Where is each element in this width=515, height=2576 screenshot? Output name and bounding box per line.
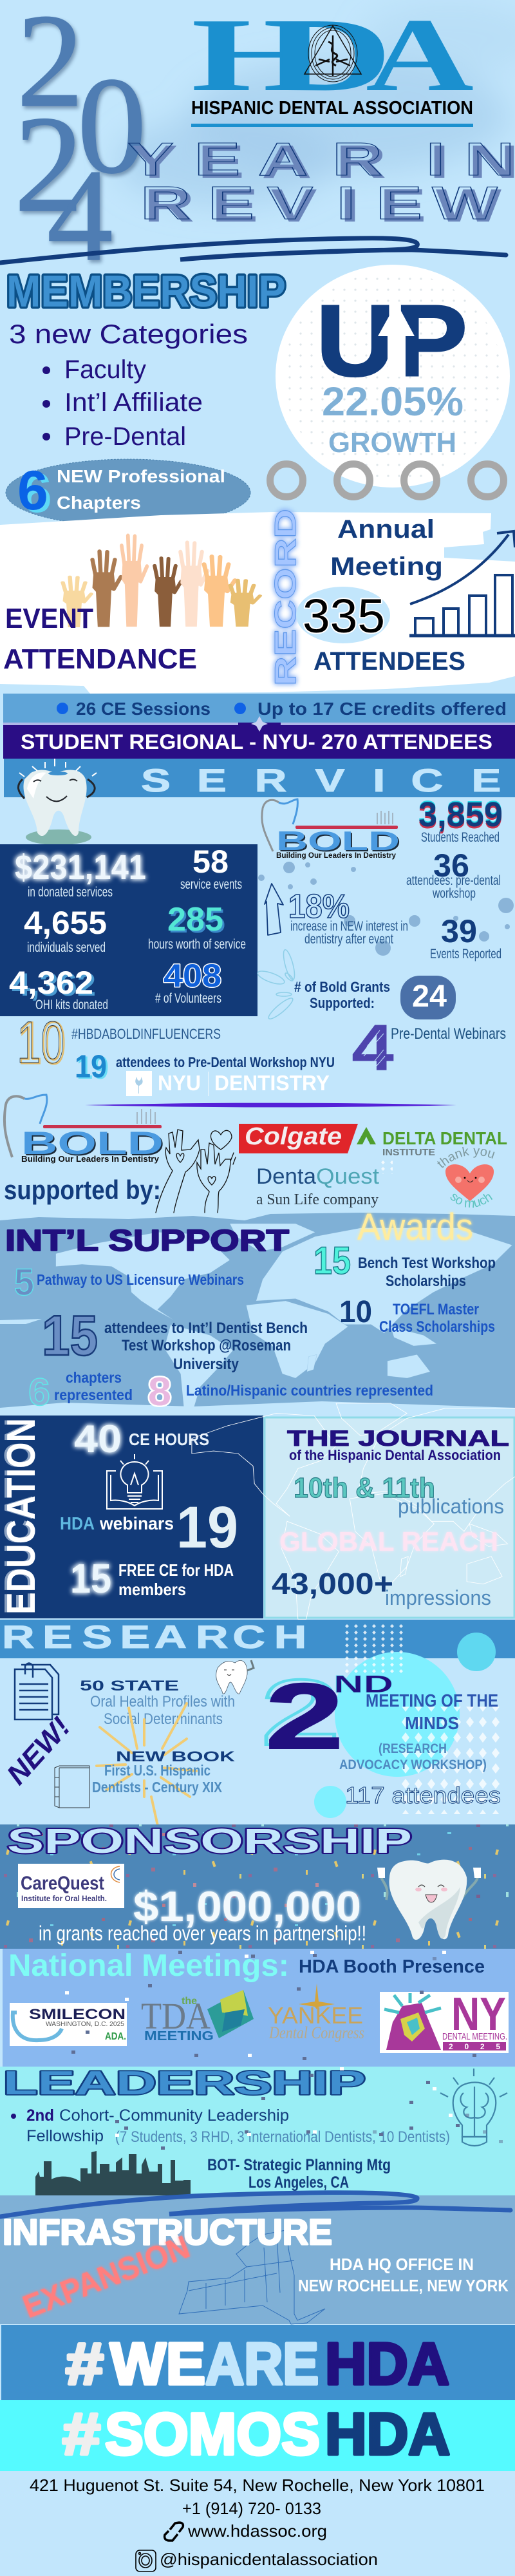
service hours stat: hours worth of service (148, 937, 246, 952)
booth presence caption: HDA Booth Presence (299, 1956, 485, 1977)
impressions stat: impressions (385, 1586, 491, 1609)
publications stat: publications (398, 1495, 504, 1518)
year 2024 stacked digits: 2 (14, 87, 84, 241)
grants caption: in grants reached over years in partnership!! (39, 1922, 366, 1945)
new chapters pill: 6 (21, 462, 52, 524)
publications stat (294, 1472, 504, 1518)
interest increase stat: dentistry after event (304, 932, 393, 947)
Yankee dental congress logo: Dental Congress (268, 2023, 364, 2042)
new book text: NEW BOOK (116, 1748, 235, 1765)
city skyline illustration (35, 2151, 191, 2195)
CE hours stat: 40 (74, 1417, 122, 1461)
UP wordmark with arrow: UP (316, 285, 467, 397)
Greater NY dental meeting logo: NY (451, 1989, 506, 2040)
address: 421 Huguenot St. Suite 54, New Rochelle, New York 10801 (30, 2476, 485, 2495)
year 2024 stacked digits: 4 (47, 142, 113, 289)
we are HDA hashtag band: WE (110, 2331, 205, 2397)
DentaQuest logo: Denta (256, 1164, 316, 1189)
white brush panel (0, 512, 515, 694)
somos HDA hashtag band (0, 2400, 515, 2471)
title: year in review: REVIEW (140, 178, 498, 229)
meeting of the minds text: 117 attendees (345, 1782, 501, 1808)
bench test scholarships stat: Scholarships (386, 1273, 466, 1290)
Delta Dental logo (357, 1127, 507, 1158)
bench test attendees stat: attendees to Int’l Dentist Bench (104, 1320, 308, 1337)
one million stat: $1,000,000 (133, 1882, 361, 1930)
impressions stat: 43,000+ (272, 1567, 393, 1600)
we are HDA hashtag band (1, 2325, 515, 2400)
335 attendees (296, 587, 465, 676)
infrastructure panel (0, 2193, 515, 2325)
header cloud texture (116, 0, 515, 206)
licensure webinars stat: 5 (14, 1262, 34, 1303)
service hours stat: 285 (167, 901, 223, 938)
bench test scholarships stat (314, 1239, 496, 1290)
free CE stat: FREE CE for HDA (118, 1560, 234, 1580)
education panel (0, 1416, 263, 1618)
document icon (15, 1663, 59, 1719)
service hours stat: 285 (169, 903, 225, 940)
national meetings panel (3, 1949, 515, 2067)
journal title (287, 1426, 509, 1463)
CE band: 26 CE Sessions (76, 699, 211, 719)
membership categories list: Faculty (64, 355, 146, 384)
Smilecon logo: SMILECON (29, 2006, 126, 2022)
CareQuest logo: CareQuest (21, 1873, 104, 1894)
CE hours stat (74, 1417, 209, 1461)
CE hours stat: CE HOURS (129, 1430, 209, 1449)
countries represented stat: Latino/Hispanic countries represented (186, 1382, 433, 1399)
fellowship list: Cohort- Community Leadership (59, 2107, 289, 2125)
individuals served stat: individuals served (27, 940, 106, 955)
licensure webinars stat (14, 1262, 244, 1303)
title: year in review: REVIEW (144, 180, 501, 232)
journal background map (192, 1403, 515, 1619)
leaf sprig icon (256, 949, 297, 1021)
NYU workshop attendees stat: attendees to Pre-Dental Workshop NYU (116, 1054, 335, 1070)
335 attendees: ATTENDEES (314, 647, 465, 676)
meeting of the minds text: ADVOCACY WORKSHOP) (339, 1757, 487, 1772)
CE band: Up to 17 CE credits offered (258, 699, 507, 719)
event attendance heading: EVENT (5, 603, 93, 634)
BOLD logo large: BOLD (23, 1126, 165, 1162)
bulb and book icon (107, 1454, 162, 1509)
HQ office text: HDA HQ OFFICE IN (330, 2255, 474, 2274)
logo letters (191, 0, 474, 113)
journal panel (192, 1403, 515, 1619)
somos HDA hashtag band: SOMOS (105, 2401, 320, 2467)
webinars stat (60, 1495, 238, 1560)
international support map panel (0, 1213, 515, 1412)
fellowship list (11, 2107, 450, 2146)
TDA meeting logo: TDA (141, 1995, 211, 2037)
service events stat: service events (180, 877, 242, 892)
gold firework burst (97, 1703, 196, 1826)
TOEFL scholarships stat (339, 1295, 495, 1336)
bench test scholarships stat: 15 (314, 1239, 351, 1282)
membership categories list: Int’l Affiliate (64, 388, 203, 417)
meeting of the minds text (339, 1690, 501, 1808)
new chapters pill: Chapters (57, 493, 141, 513)
TOEFL scholarships stat: TOEFL Master (393, 1301, 479, 1318)
volunteers stat: # of Volunteers (155, 991, 221, 1006)
New York state map (179, 2230, 325, 2324)
NYU workshop attendees stat: 19 (77, 1050, 109, 1086)
chapters represented stat (28, 1369, 133, 1414)
raised hands illustration (63, 536, 260, 627)
Smilecon logo: WASHINGTON, D.C. 2025 (46, 2021, 124, 2028)
new book text: Dentists - Century XIX (92, 1779, 223, 1795)
volunteers stat: 408 (164, 958, 221, 994)
free CE stat: members (118, 1580, 186, 1599)
logo letters: H (191, 0, 323, 113)
website: www.hdassoc.org (187, 2521, 327, 2541)
bench test attendees stat: Test Workshop @Roseman (122, 1337, 291, 1354)
DentaQuest logo: Quest (316, 1164, 380, 1189)
decorative grey rings (270, 464, 503, 497)
bold grants stat (294, 976, 456, 1019)
BOLD logo small: Building Our Leaders In Dentistry (276, 851, 396, 860)
confetti squares overlay (65, 1951, 503, 2150)
free CE stat (70, 1555, 234, 1602)
scribble underline (0, 238, 506, 263)
BOLD logo small: BOLD (276, 826, 400, 856)
instagram handle: @hispanicdentalassociation (160, 2550, 378, 2569)
logo letters: A (366, 0, 474, 113)
second meeting numeral: ND (333, 1671, 393, 1698)
tooth mascot (18, 759, 97, 845)
second meeting numeral (261, 1660, 393, 1768)
events reported stat: 39 (441, 913, 477, 949)
service hours stat (148, 901, 246, 952)
HQ office text (298, 2255, 509, 2295)
NYU Dentistry logo: DENTISTRY (214, 1071, 330, 1095)
individuals served stat: 4,655 (24, 905, 107, 941)
logo wordmark: HISPANIC DENTAL ASSOCIATION (191, 98, 473, 118)
pre-dental attendees stat: workshop (432, 886, 476, 901)
small tooth thumbs up (216, 1660, 254, 1694)
335 attendees: 335 (303, 589, 385, 643)
new book text: First U.S. Hispanic (104, 1762, 211, 1779)
Delta Dental logo: INSTITUTE (382, 1147, 435, 1158)
fifty state profiles text: Social Determinants (104, 1710, 223, 1728)
record vertical label: RECORD (268, 509, 302, 686)
footer contact details (30, 2476, 485, 2571)
bench test attendees stat: University (173, 1356, 239, 1373)
OHI kits stat (9, 965, 108, 1012)
logo emblem (304, 25, 361, 82)
bench test scholarships stat: Bench Test Workshop (358, 1255, 496, 1272)
Greater NY dental meeting logo: 2025 (449, 2042, 500, 2051)
event attendance heading (3, 603, 197, 675)
title: year in review: YEAR IN (127, 134, 514, 185)
annual meeting heading: Meeting (330, 553, 443, 581)
free CE stat: 15 (70, 1555, 111, 1602)
NYU Dentistry logo: NYU (158, 1071, 201, 1095)
chapters represented stat: 6 (28, 1370, 50, 1414)
new book text (92, 1748, 235, 1795)
BOLD logo large: Building Our Leaders In Dentistry (21, 1154, 160, 1164)
BOLD logo small: BOLD (277, 827, 401, 857)
meeting of the minds text: MINDS (405, 1713, 459, 1733)
national meetings heading: National Meetings: (8, 1949, 289, 1983)
bench test attendees stat: 15 (42, 1303, 98, 1367)
new chapters pill (6, 459, 250, 526)
growth label: GROWTH (328, 427, 456, 459)
fellowship list: Fellowship (26, 2127, 104, 2145)
NYU workshop attendees stat: 19 (75, 1048, 107, 1084)
heading: membership: MEMBERSHIP (6, 266, 286, 316)
strategic planning meeting text: Los Angeles, CA (248, 2174, 349, 2192)
chapters represented stat: chapters (66, 1369, 122, 1386)
interest increase stat: 18% (288, 888, 350, 925)
service events stat (180, 844, 242, 892)
expansion stamp: EXPANSION (18, 2229, 194, 2325)
service stats panel (0, 844, 258, 1016)
we are HDA hashtag band: # (66, 2331, 104, 2397)
decorative blue dots (258, 862, 514, 956)
awards heading: Awards (357, 1206, 473, 1248)
title: year in review (127, 134, 515, 232)
up arrow icon (265, 884, 283, 935)
influencers stat: #HBDABOLDINFLUENCERS (71, 1026, 221, 1042)
somos HDA hashtag band: HDA (325, 2401, 450, 2467)
webinars stat: webinars (99, 1513, 174, 1533)
logo letters: D (264, 0, 393, 113)
thank you heart: so much (451, 1194, 493, 1208)
Yankee dental congress logo (268, 1984, 364, 2042)
sponsorship heading: SPONSORSHIP (7, 1822, 412, 1861)
growth percentage: 22.05% (322, 379, 464, 424)
year 2024 stacked digits: 0 (77, 48, 147, 202)
influencers stat (17, 1010, 221, 1076)
brain bulb icon (440, 2069, 507, 2146)
pre-dental attendees stat: 36 (433, 848, 469, 884)
leadership panel (0, 2065, 515, 2195)
year 2024 stacked digits (14, 0, 147, 289)
thank you heart (437, 1146, 494, 1208)
chapters represented stat: represented (54, 1387, 133, 1403)
Colgate logo (239, 1123, 358, 1153)
meeting of the minds text: (RESEARCH (379, 1741, 447, 1756)
webinars stat: 19 (176, 1495, 238, 1560)
donated services stat: in donated services (28, 885, 113, 900)
webinars stat: HDA (60, 1513, 95, 1533)
education vertical heading: EDUCATION (0, 1418, 44, 1615)
Colgate logo: Colgate (245, 1123, 342, 1150)
influencers stat: 10 (18, 1010, 66, 1076)
we are HDA hashtag band: HDA (325, 2331, 449, 2397)
countries represented stat: 8 (148, 1370, 171, 1414)
students reached stat: 3,859 (418, 797, 503, 836)
influencers stat: 10 (17, 1010, 64, 1075)
HDA logo (191, 0, 474, 127)
Smilecon logo: ADA. (105, 2031, 126, 2042)
donated services stat: $231,141 (15, 848, 146, 887)
fifty state profiles text: Oral Health Profiles with (90, 1693, 235, 1710)
new exclamation label: NEW! (1, 1711, 77, 1791)
TDA meeting logo (141, 1990, 254, 2043)
rising bar chart icon (409, 531, 515, 636)
membership categories list: 3 new Categories (9, 319, 248, 349)
service band (4, 759, 515, 799)
OHI kits stat: OHI kits donated (35, 998, 108, 1012)
OHI kits stat: 4,362 (12, 967, 96, 1003)
Greater NY dental meeting logo (380, 1989, 509, 2053)
BOLD logo small (262, 799, 401, 860)
student regional band (3, 716, 515, 759)
growth circle (276, 265, 510, 488)
second meeting numeral: 2 (265, 1664, 344, 1768)
students reached stat: 3,859 (418, 795, 503, 834)
interest increase stat (288, 888, 408, 947)
pre-dental webinars stat (351, 1011, 506, 1084)
strategic planning meeting text: BOT- Strategic Planning Mtg (207, 2156, 391, 2174)
we are HDA hashtag band: ARE (205, 2331, 319, 2397)
Delta Dental logo: DELTA DENTAL (382, 1128, 507, 1148)
journal title: of the Hispanic Dental Association (289, 1447, 501, 1463)
BOLD logo large (5, 1095, 165, 1164)
impressions stat (272, 1567, 491, 1609)
fellowship list: (7 Students, 3 RHD, 3 International Dentists, 10 Dentists) (115, 2128, 450, 2146)
bold grants stat: 24 (412, 980, 447, 1014)
international support heading: INT’L SUPPORT (5, 1224, 289, 1257)
phone: +1 (914) 720- 0133 (182, 2499, 321, 2518)
Smilecon logo (10, 2003, 127, 2046)
donated services stat (15, 848, 146, 900)
membership categories list (9, 319, 248, 451)
OHI kits stat: 4,362 (9, 965, 93, 1001)
pre-dental webinars stat: 4 (351, 1011, 394, 1084)
TDA meeting logo: the (182, 1996, 197, 2007)
leadership heading: LEADERSHIP (3, 2065, 366, 2102)
annual meeting heading: Annual (337, 515, 435, 544)
student regional band: STUDENT REGIONAL - NYU- 270 ATTENDEES (21, 730, 492, 753)
BOLD logo large: BOLD (21, 1125, 164, 1161)
fifty state profiles text: 50 STATE (80, 1678, 179, 1694)
supported by heading: supported by: (4, 1175, 161, 1205)
CE band (3, 694, 515, 723)
fifty state profiles text (80, 1678, 235, 1728)
scribble underline (0, 2193, 510, 2217)
bold grants stat: Supported: (310, 995, 375, 1011)
sponsorship panel (0, 1822, 515, 1949)
logo underline (191, 124, 473, 127)
DentaQuest logo: a Sun Life company (256, 1191, 379, 1208)
research band (0, 1619, 515, 1658)
TOEFL scholarships stat: 10 (339, 1295, 372, 1329)
volunteers stat (155, 958, 221, 1006)
global reach label: GLOBAL REACH (279, 1526, 498, 1557)
cheering tooth illustration (377, 1860, 481, 1940)
strategic planning meeting text (207, 2156, 391, 2192)
book icon (55, 1766, 89, 1808)
research band: RESEARCH (2, 1619, 306, 1655)
somos HDA hashtag band: # (62, 2401, 100, 2467)
countries represented stat (148, 1370, 433, 1414)
licensure webinars stat: Pathway to US Licensure Webinars (37, 1271, 244, 1288)
second meeting numeral: 2 (261, 1660, 340, 1765)
TDA meeting logo: MEETING (144, 2029, 214, 2043)
new chapters pill: NEW Professional (57, 466, 225, 486)
publications stat: 10th & 11th (294, 1472, 435, 1504)
title: year in review: YEAR IN (131, 137, 515, 188)
NYU Dentistry logo (126, 1071, 330, 1096)
NYU workshop attendees stat (75, 1048, 335, 1086)
CareQuest logo: Institute for Oral Health. (21, 1894, 107, 1903)
individuals served stat (24, 905, 107, 955)
infrastructure heading: INFRASTRUCTURE (3, 2211, 332, 2252)
meeting of the minds text: MEETING OF THE (366, 1690, 498, 1710)
Yankee dental congress logo: YANKEE (268, 2002, 363, 2029)
journal title: THE JOURNAL (287, 1426, 509, 1451)
new chapters pill: 6 (17, 460, 48, 522)
bench test attendees stat (42, 1303, 308, 1373)
fellowship list: 2nd (26, 2107, 54, 2125)
instagram icon (136, 2550, 156, 2571)
events reported stat (430, 913, 501, 961)
interest increase stat: increase in NEW interest in (290, 919, 408, 934)
DentaQuest logo (256, 1160, 393, 1208)
CareQuest logo (18, 1864, 124, 1908)
annual meeting heading (330, 515, 443, 581)
event attendance heading: ATTENDANCE (3, 643, 197, 675)
students reached stat: 3,859 (418, 794, 503, 833)
hands and hearts line art (156, 1130, 236, 1213)
research decorative shapes (314, 1622, 503, 1818)
service band: SERVICE (141, 762, 501, 799)
purple divider stroke (85, 1103, 456, 1107)
pre-dental attendees stat (406, 848, 501, 901)
thank you heart: thank you (437, 1146, 494, 1168)
bold grants stat: # of Bold Grants (294, 979, 390, 995)
membership categories list: Pre-Dental (64, 422, 186, 451)
service events stat: 58 (192, 844, 229, 880)
link icon (165, 2523, 183, 2541)
